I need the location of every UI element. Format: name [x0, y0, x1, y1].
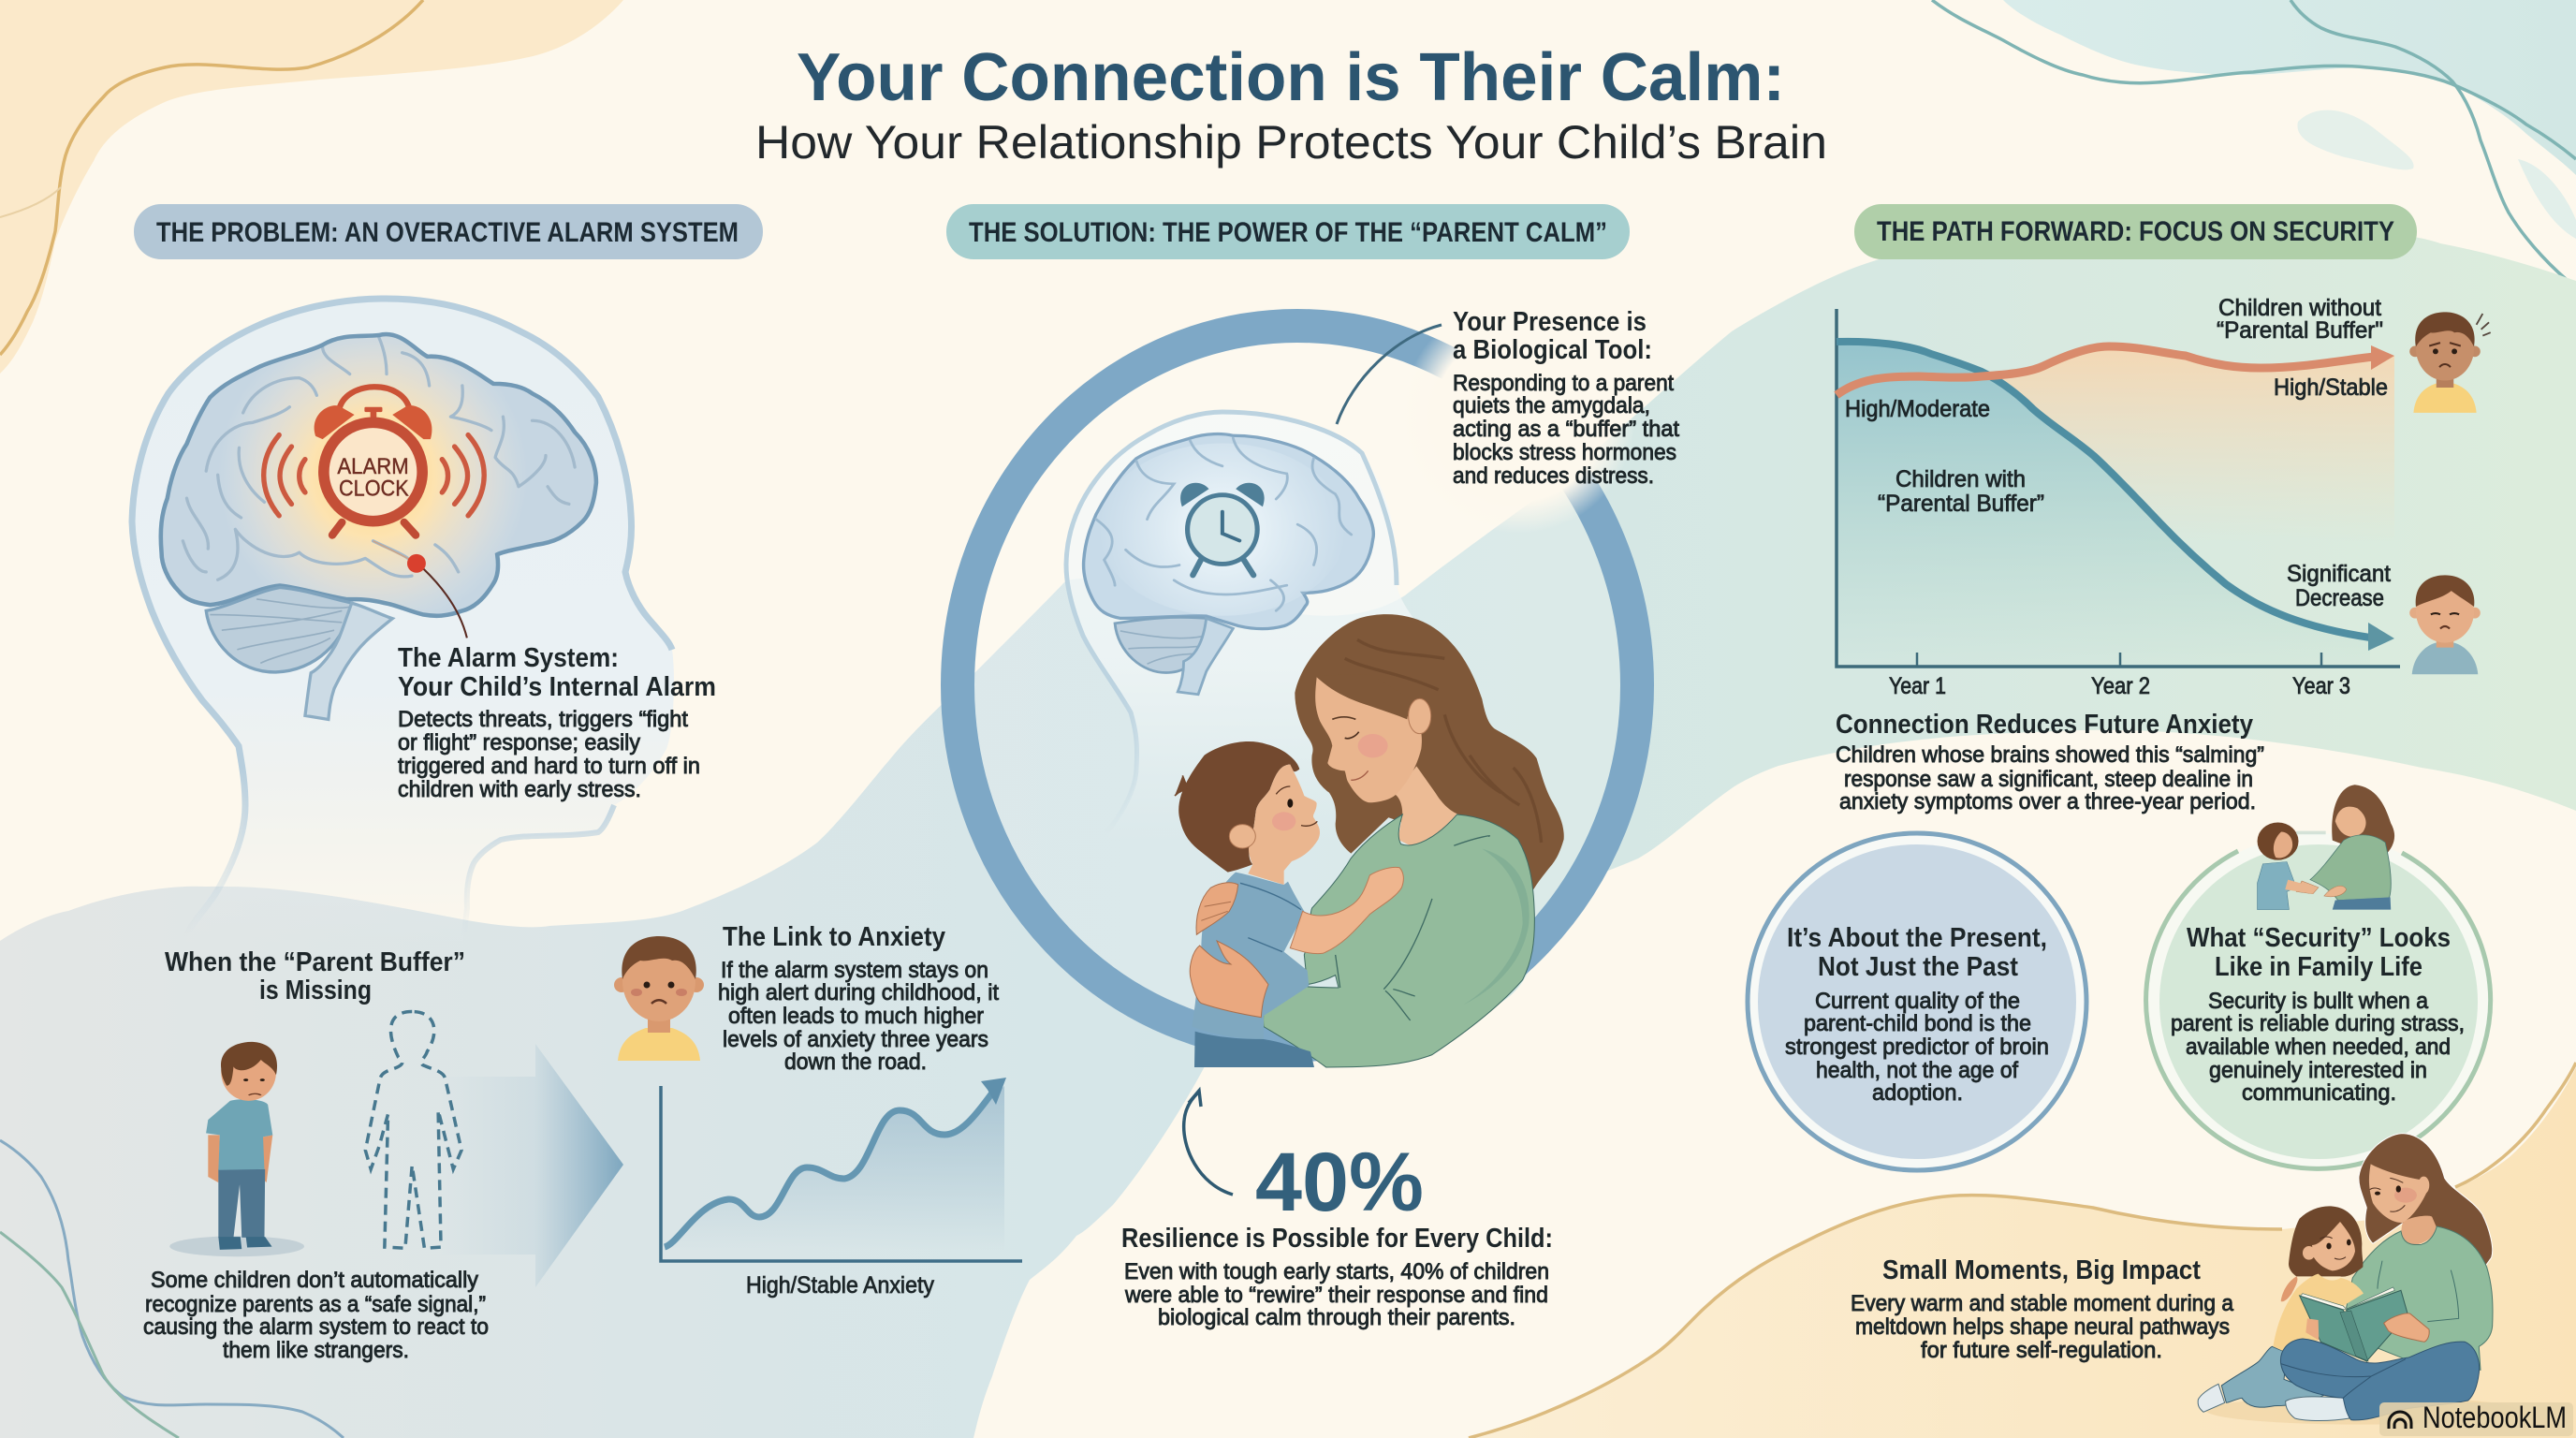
alarm clock icon: CLOCK	[339, 476, 409, 501]
alarm clock icon	[264, 387, 484, 536]
text: your presence is a biological tool: a Biological Tool:	[1453, 335, 1652, 365]
chart: rising anxiety line: High/Stable Anxiety	[746, 1272, 934, 1299]
head outline	[132, 299, 672, 937]
text: the alarm system: Detects threats, triggers “fight	[398, 707, 688, 732]
circle: what security looks like: What “Security” Looks	[2187, 923, 2451, 953]
heading pill: the problem	[134, 204, 763, 259]
text: the link to anxiety: high alert during childhood, it	[718, 980, 999, 1005]
text: resilience is possible: biological calm through their parents.	[1158, 1305, 1515, 1330]
title	[755, 40, 1827, 169]
title: Your Connection is Their Calm:	[797, 40, 1785, 115]
calm head silhouette	[1066, 412, 1460, 843]
chart labels: Significant	[2287, 561, 2391, 587]
callout leader line	[1337, 325, 1442, 424]
text: the alarm system: Your Child’s Internal Alarm	[398, 672, 716, 702]
text: connection reduces future anxiety: response saw a significant, steep dealine in	[1844, 767, 2253, 792]
text: your presence is a biological tool	[1453, 307, 1679, 489]
circle: about the present: health, not the age of	[1816, 1058, 2018, 1083]
text: the link to anxiety: often leads to much higher	[728, 1004, 984, 1029]
text: when the parent buffer is missing: is Missing	[259, 976, 372, 1005]
circle: what security looks like: genuinely interested in	[2209, 1058, 2427, 1083]
text: your presence is a biological tool: blocks stress hormones	[1453, 440, 1676, 465]
circle: about the present: It’s About the Present,	[1787, 923, 2047, 953]
icon: sad boy standing	[169, 1042, 304, 1256]
chart labels: Year 1	[1889, 673, 1946, 699]
text: small moments, big impact: meltdown helps shape neural pathways	[1855, 1314, 2230, 1340]
calm brain with clock	[1084, 434, 1373, 695]
text: connection reduces future anxiety: Children whose brains showed this “salming”	[1836, 742, 2264, 768]
chart labels: High/Moderate	[1845, 396, 1990, 422]
circle: what security looks like	[2146, 833, 2491, 1170]
circle: about the present: parent-child bond is the	[1804, 1011, 2031, 1036]
head neck outline	[463, 805, 614, 946]
icon: calmer child	[2409, 575, 2481, 674]
icon: worried child face	[614, 936, 704, 1061]
chart labels: High/Stable	[2274, 374, 2388, 401]
circle: what security looks like: Like in Family Life	[2215, 952, 2422, 982]
text: resilience is possible: Even with tough early starts, 40% of children	[1124, 1259, 1549, 1284]
chart labels: Decrease	[2295, 585, 2384, 611]
text: small moments, big impact	[1851, 1255, 2234, 1363]
text: connection reduces future anxiety: Connection Reduces Future Anxiety	[1836, 710, 2253, 740]
text: the alarm system: The Alarm System:	[398, 643, 619, 673]
heading pill: the problem: THE PROBLEM: AN OVERACTIVE ALARM SYSTEM	[156, 217, 739, 248]
text: your presence is a biological tool: quiets the amygdala,	[1453, 393, 1650, 418]
text: small moments, big impact: Small Moments, Big Impact	[1882, 1255, 2201, 1285]
text: the alarm system: triggered and hard to turn off in	[398, 754, 700, 779]
text: when the parent buffer is missing: When the “Parent Buffer”	[165, 947, 465, 977]
chart labels	[1845, 295, 2391, 699]
illustration: parent holding child's hand	[2258, 785, 2394, 910]
text: your presence is a biological tool: acting as a “buffer” that	[1453, 417, 1679, 442]
circle: what security looks like: available when needed, and	[2186, 1034, 2451, 1060]
text: the alarm system	[398, 643, 716, 802]
text: the link to anxiety: The Link to Anxiety	[723, 922, 945, 952]
chart: anxiety over three years	[1837, 295, 2400, 699]
text: your presence is a biological tool: and reduces distress.	[1453, 463, 1654, 489]
panel: the path forward	[1748, 204, 2573, 1436]
text: when the parent buffer is missing	[165, 947, 465, 1005]
circle: about the present: Not Just the Past	[1818, 952, 2018, 982]
brain with alarm clock	[152, 319, 602, 719]
calm head outline	[1066, 412, 1397, 834]
panel: the solution	[946, 204, 1679, 1330]
icon: dashed outline of missing parent	[365, 1012, 461, 1248]
stat: 40 percent	[1184, 1091, 1424, 1228]
panel: the problem	[132, 204, 1022, 1363]
heading pill: the solution	[946, 204, 1630, 259]
chart: rising anxiety line	[661, 1078, 1022, 1299]
icon: stressed child	[2409, 312, 2491, 413]
text: your presence is a biological tool: Responding to a parent	[1453, 371, 1674, 396]
circle: what security looks like: communicating.	[2242, 1080, 2396, 1106]
arrow: large flow arrow	[440, 1044, 623, 1287]
chart labels: “Parental Buffer”	[1878, 491, 2044, 517]
text: your presence is a biological tool: Your Presence is	[1453, 307, 1647, 337]
text: resilience is possible: Resilience is Possible for Every Child:	[1121, 1224, 1553, 1254]
text: small moments, big impact: Every warm and stable moment during a	[1851, 1291, 2234, 1316]
illustration: mother reading with daughter	[2198, 1134, 2518, 1425]
text: the alarm system: or flight” response; easily	[398, 730, 640, 756]
heading pill: the path forward	[1854, 204, 2417, 259]
heading pill: the solution: THE SOLUTION: THE POWER OF THE “PARENT CALM”	[969, 217, 1607, 248]
chart labels: Children with	[1895, 466, 2026, 492]
chart labels: Year 3	[2292, 673, 2350, 699]
text: some children: causing the alarm system to react to	[143, 1314, 489, 1340]
line: with parental buffer	[1837, 342, 2394, 651]
text: the link to anxiety: down the road.	[784, 1049, 927, 1075]
text: the link to anxiety: If the alarm system stays on	[721, 958, 988, 983]
circle: what security looks like: parent is reliable during strass,	[2171, 1011, 2465, 1036]
text: the alarm system: children with early stress.	[398, 777, 641, 802]
chart labels: “Parental Buffer"	[2217, 317, 2383, 344]
text: small moments, big impact: for future self-regulation.	[1921, 1338, 2162, 1363]
brainstem	[305, 603, 392, 719]
text: some children	[143, 1268, 489, 1363]
text: connection reduces future anxiety: anxiety symptoms over a three-year period.	[1839, 789, 2256, 814]
clock icon: calm	[1180, 483, 1265, 575]
text: the link to anxiety: levels of anxiety three years	[723, 1027, 988, 1052]
text: resilience is possible: were able to “rewire” their response and find	[1124, 1283, 1548, 1308]
text: connection reduces future anxiety	[1836, 710, 2264, 814]
stat: 40 percent: 40%	[1255, 1135, 1424, 1228]
head silhouette	[132, 299, 674, 946]
text: some children: recognize parents as a “safe signal,”	[145, 1292, 486, 1317]
text: some children: Some children don’t automatically	[151, 1268, 478, 1293]
heading pill: the path forward: THE PATH FORWARD: FOCUS ON SECURITY	[1877, 216, 2394, 247]
circle: what security looks like: Security is bullt when a	[2208, 989, 2429, 1014]
cerebellum	[206, 588, 352, 672]
chart labels: Year 2	[2091, 673, 2150, 699]
circle: about the present: adoption.	[1872, 1080, 1963, 1106]
circle: about the present: strongest predictor of broin	[1785, 1034, 2049, 1060]
chart labels: Children without	[2218, 295, 2381, 321]
subtitle: How Your Relationship Protects Your Child’s Brain	[755, 116, 1827, 169]
circle: about the present	[1748, 833, 2086, 1170]
text: some children: them like strangers.	[223, 1338, 409, 1363]
illustration: mother hugging child	[1175, 614, 1564, 1067]
ring	[958, 300, 1637, 1045]
line: without parental buffer	[1837, 345, 2394, 395]
alarm clock icon: ALARM	[337, 454, 409, 479]
arrow: curved up to family	[1184, 1091, 1233, 1195]
text: the link to anxiety	[718, 922, 999, 1075]
circle: about the present: Current quality of the	[1815, 989, 2020, 1014]
amygdala marker and leader line	[373, 541, 467, 638]
text: resilience is possible	[1121, 1224, 1553, 1330]
